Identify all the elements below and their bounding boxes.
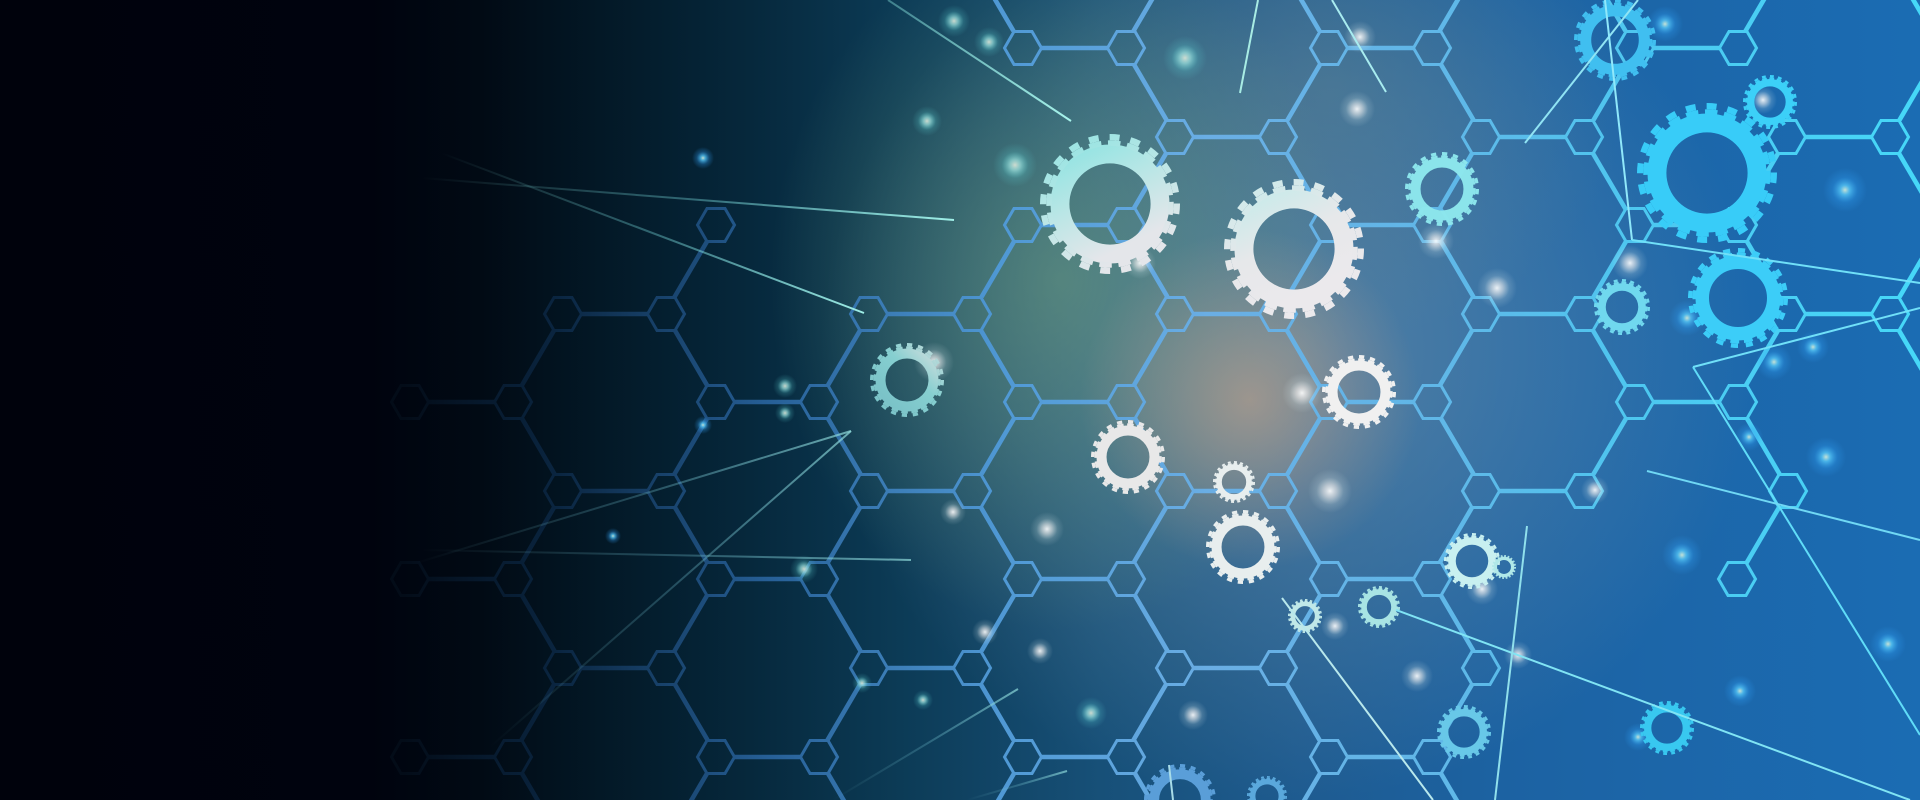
gear 13 [1438,706,1490,758]
gear 5 [1324,357,1394,427]
gear 10 [1493,556,1515,578]
gear 11 [1359,587,1399,627]
gear 18 [1744,76,1796,128]
gear 19 [1640,106,1774,240]
gear 17 [1576,1,1654,79]
hexagon network [390,0,1920,800]
gear 3 [1407,154,1477,224]
gear 16 [1248,777,1286,800]
gear 8 [1208,512,1278,582]
glowing particles [605,5,1906,751]
gear 7 [1214,462,1254,502]
gear 1 [1043,137,1177,271]
gear 6 [1093,422,1163,492]
gear 9 [1445,534,1499,588]
gear 20 [1690,250,1786,346]
light rays [416,0,1920,800]
gear 15 [1146,766,1214,800]
gear 14 [1641,702,1693,754]
gear 12 [1289,600,1321,632]
gear 2 [1227,182,1361,316]
gear 4 [872,345,942,415]
gear 21 [1595,280,1649,334]
